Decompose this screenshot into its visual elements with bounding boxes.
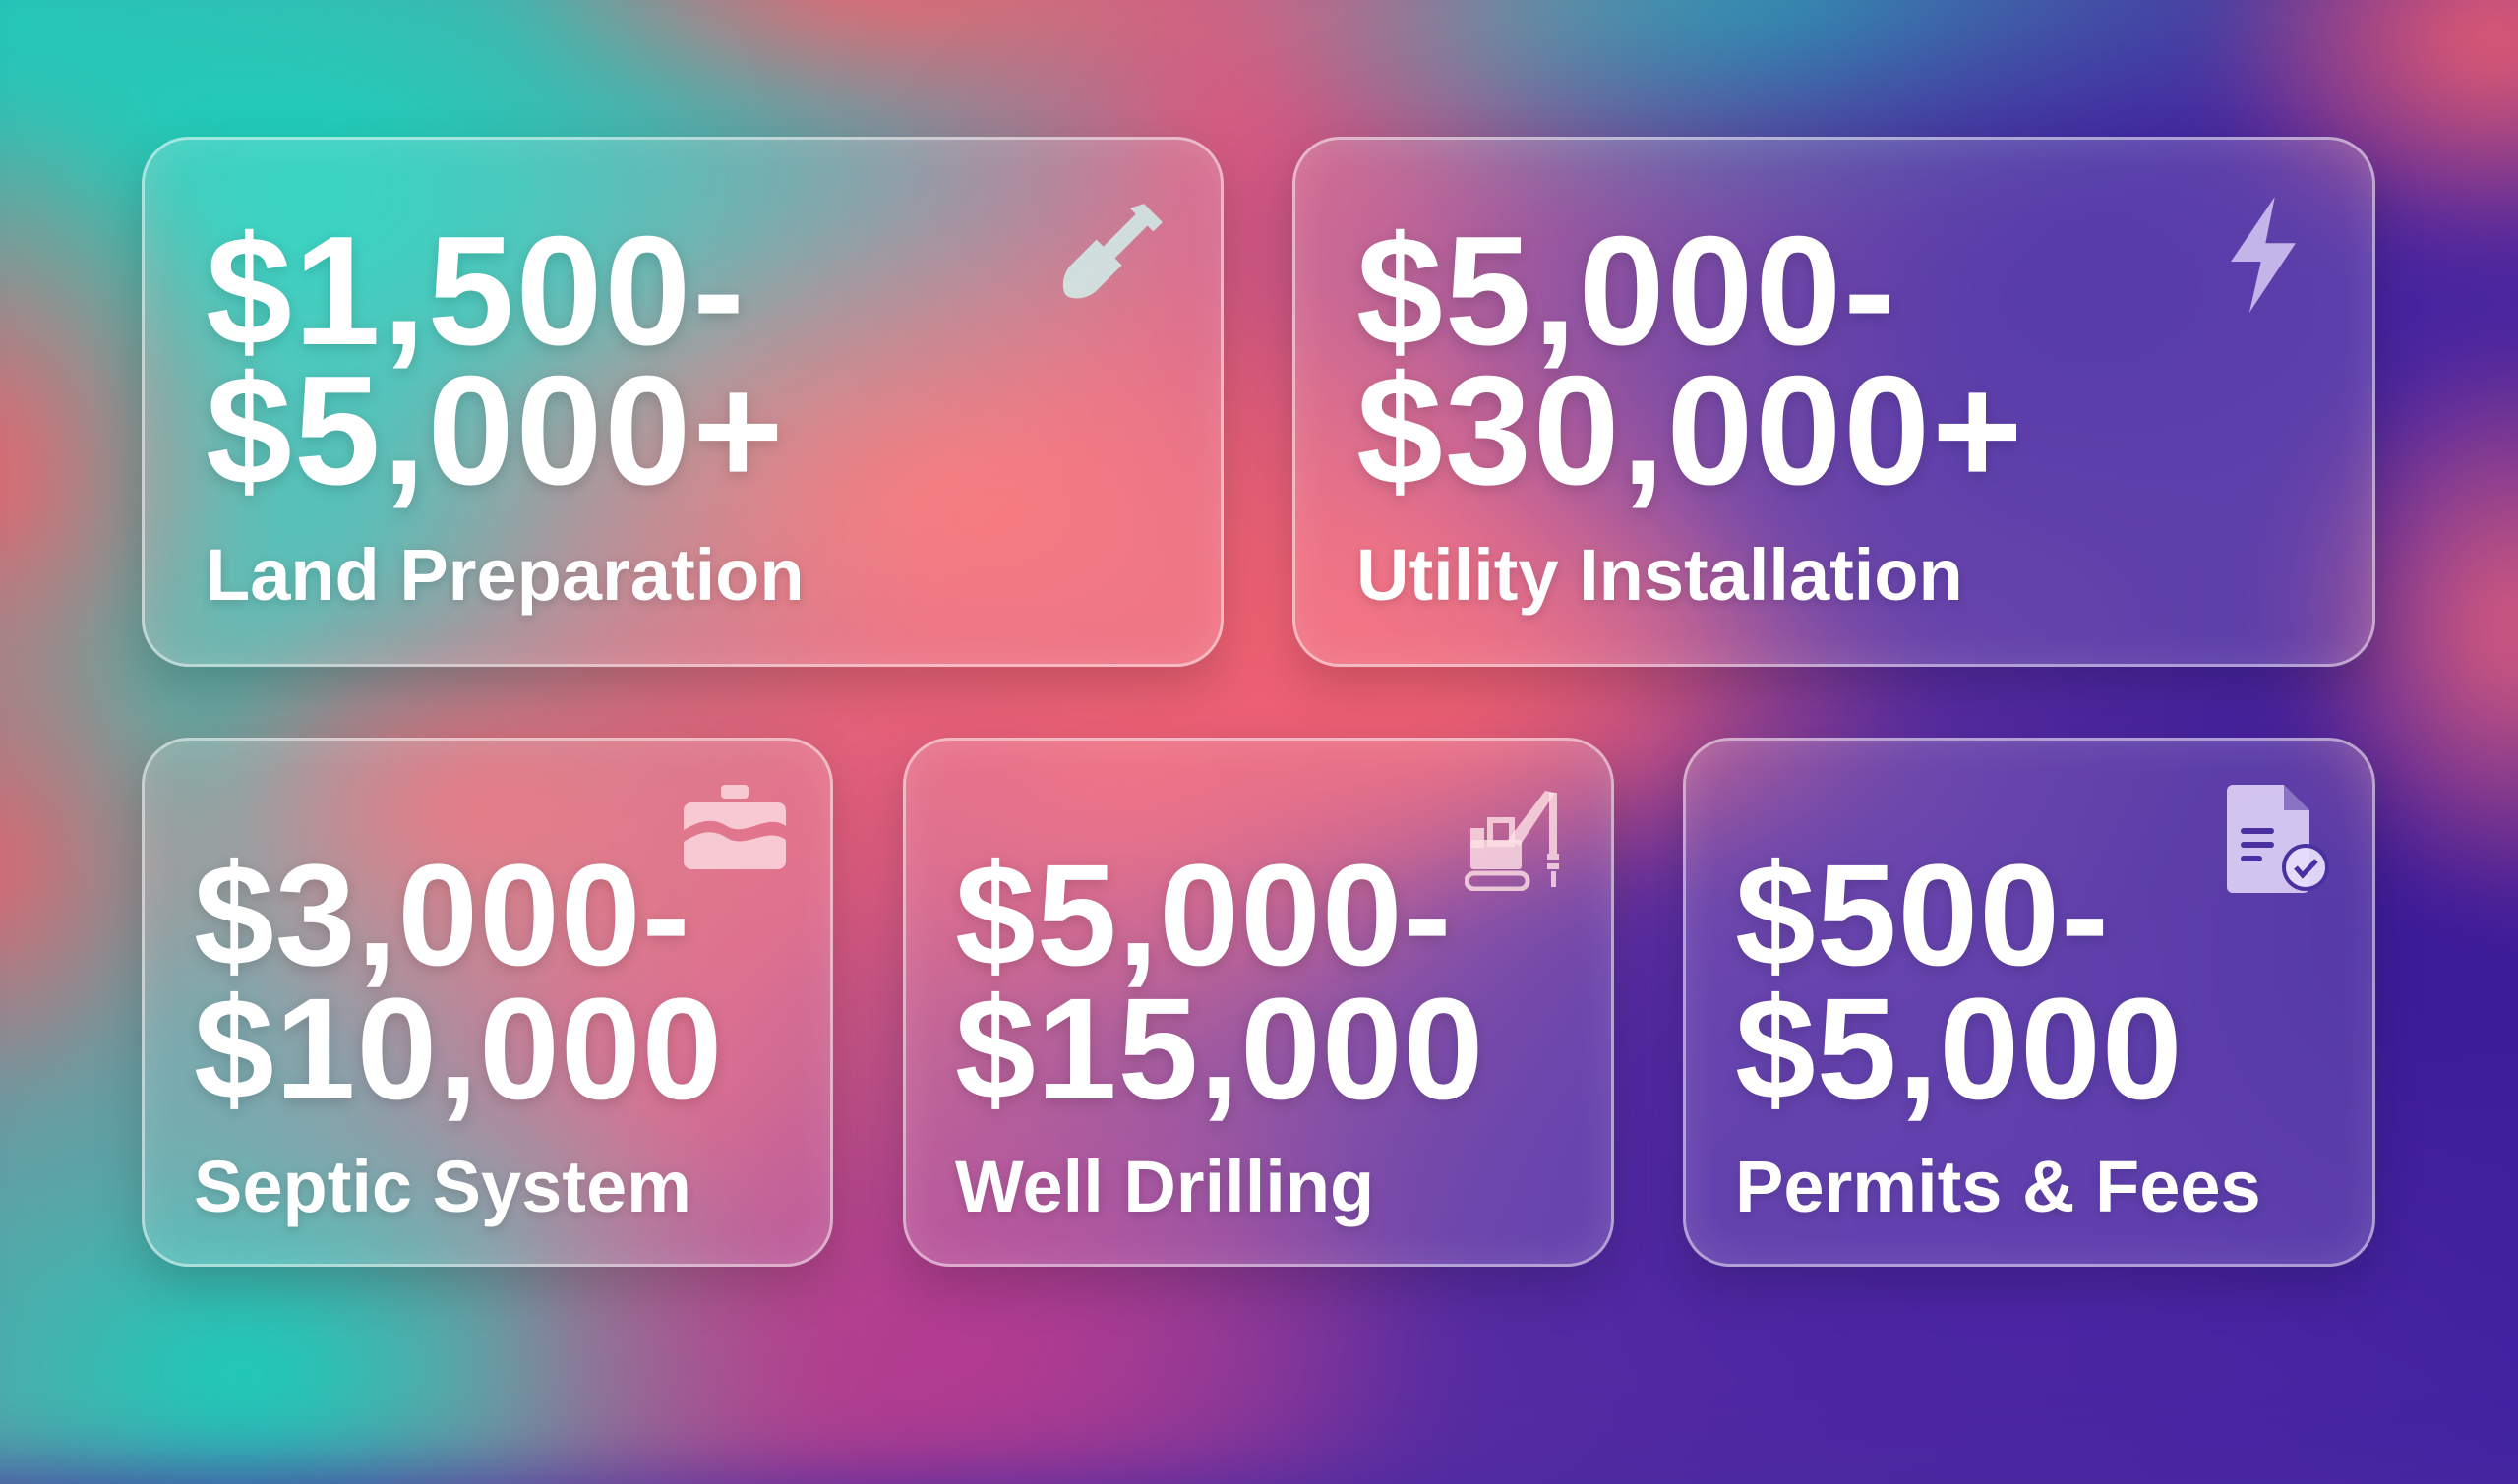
price: utility installation: $5,000-: [1356, 205, 1897, 378]
price: land preparation: $5,000+: [206, 344, 786, 517]
price: utility installation: [1356, 205, 2024, 517]
label: permits & fees: Permits & Fees: [1735, 1146, 2261, 1227]
price: permits & fees: $5,000: [1735, 969, 2184, 1130]
card: septic system: [142, 738, 833, 1267]
price: utility installation: $30,000+: [1356, 344, 2024, 517]
price: septic system: $10,000: [194, 969, 723, 1130]
price: well drilling: $15,000: [955, 969, 1484, 1130]
icon: drilling rig: [1465, 791, 1559, 891]
price: land preparation: $1,500-: [206, 205, 747, 378]
price: septic system: $3,000-: [194, 835, 691, 996]
card: land preparation: [142, 137, 1224, 667]
price: permits & fees: $500-: [1735, 835, 2110, 996]
price: land preparation: [206, 205, 786, 517]
price: well drilling: [955, 835, 1484, 1130]
card: utility installation: [1292, 137, 2375, 667]
label: well drilling: Well Drilling: [955, 1146, 1374, 1227]
icon: lightning bolt: [2231, 197, 2296, 313]
icon: shovel: [1062, 204, 1163, 299]
label: utility installation: Utility Installation: [1356, 534, 1963, 616]
card: permits & fees: [1683, 738, 2375, 1267]
card: well drilling: [903, 738, 1614, 1267]
price: well drilling: $5,000-: [955, 835, 1453, 996]
icon: septic tank: [684, 785, 786, 869]
price: septic system: [194, 835, 723, 1130]
icon: document with check: [2227, 785, 2329, 893]
label: septic system: Septic System: [194, 1146, 691, 1227]
price: permits & fees: [1735, 835, 2184, 1130]
label: land preparation: Land Preparation: [206, 534, 805, 616]
